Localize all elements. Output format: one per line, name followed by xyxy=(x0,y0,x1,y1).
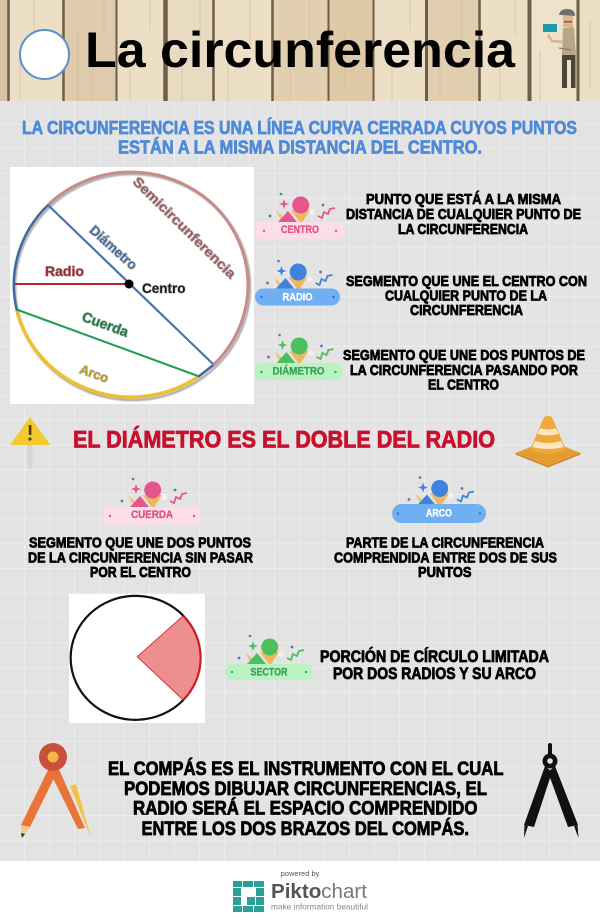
text: definition of cuerda: SEGMENTO QUE UNE DOS PUNTOS xyxy=(29,534,251,552)
text: definition of arco: PUNTOS xyxy=(418,564,472,581)
badge: radio: RADIO xyxy=(282,292,313,304)
powered by label: powered by xyxy=(281,869,320,878)
arc: blue small xyxy=(198,365,213,377)
icon: man holding a card xyxy=(543,9,576,88)
icon: black compass xyxy=(524,743,578,838)
Piktochart logo mark xyxy=(233,881,264,912)
intro text xyxy=(22,117,577,158)
heading: diameter is double the radius: EL DIÁMETRO ES EL DOBLE DEL RADIO xyxy=(73,426,495,454)
text: definition of arco: PARTE DE LA CIRCUNFERENCIA xyxy=(346,534,544,552)
arc: blue left xyxy=(14,205,48,311)
text: compass explanation: RADIO SERÁ EL ESPACIO COMPRENDIDO xyxy=(133,798,478,820)
badge: sector xyxy=(225,635,313,680)
text: definition of sector: PORCIÓN DE CÍRCULO LIMITADA xyxy=(320,647,549,666)
radius line xyxy=(15,283,129,285)
text: definition of radio xyxy=(346,273,587,319)
intro text: ESTÁN A LA MISMA DISTANCIA DEL CENTRO. xyxy=(118,136,482,158)
text: compass explanation: ENTRE LOS DOS BRAZOS DEL COMPÁS. xyxy=(142,818,469,840)
label: Cuerda: Cuerda xyxy=(80,308,131,340)
label: Semicircunferencia: Semicircunferencia xyxy=(130,174,239,282)
text: compass explanation xyxy=(108,758,504,840)
footer xyxy=(0,861,600,921)
text: definition of diámetro: EL CENTRO xyxy=(428,376,499,394)
text: definition of cuerda: POR EL CENTRO xyxy=(90,564,191,581)
label: Centro: Centro xyxy=(142,281,186,296)
text: definition of cuerda: DE LA CIRCUNFERENCIA SIN PASAR xyxy=(28,550,253,566)
arc: yellow xyxy=(17,311,198,397)
text: definition of centro: PUNTO QUE ESTÁ A LA MISMA xyxy=(366,191,561,208)
badge: diámetro: DIÁMETRO xyxy=(272,364,325,378)
chord line xyxy=(18,310,198,376)
text: definition of radio: CIRCUNFERENCIA xyxy=(410,302,523,319)
badge: centro xyxy=(255,193,345,239)
text: definition of radio: CUALQUIER PUNTO DE LA xyxy=(385,288,547,304)
badge: cuerda: CUERDA xyxy=(131,509,173,521)
icon: warning sign xyxy=(10,417,50,469)
diagram: circular sector xyxy=(69,594,205,723)
label: Radio: Radio xyxy=(45,263,84,279)
icon: header circle xyxy=(20,30,69,79)
tagline: make information beautiful xyxy=(271,902,368,912)
label: Arco: Arco xyxy=(78,361,111,386)
diagram: parts of the circumference xyxy=(10,167,254,404)
text: definition of arco: COMPRENDIDA ENTRE DOS DE SUS xyxy=(334,550,557,566)
badge: centro: CENTRO xyxy=(281,224,319,236)
centre point xyxy=(124,280,134,288)
label: Diámetro: Diámetro xyxy=(87,222,140,273)
badge: sector: SECTOR xyxy=(250,666,288,678)
badge: arco xyxy=(392,476,486,523)
icon: orange compass xyxy=(21,743,91,838)
text: compass explanation: PODEMOS DIBUJAR CIRCUNFERENCIAS, EL xyxy=(124,779,487,800)
text: definition of cuerda xyxy=(28,534,253,581)
text: definition of sector: POR DOS RADIOS Y SU ARCO xyxy=(333,665,536,683)
text: definition of arco xyxy=(334,534,557,581)
text: definition of sector xyxy=(320,647,549,683)
text: compass explanation: EL COMPÁS ES EL INSTRUMENTO CON EL CUAL xyxy=(108,758,504,780)
text: definition of centro xyxy=(346,191,581,238)
arc: semicircumference xyxy=(48,172,248,365)
badge: arco: ARCO xyxy=(426,508,452,520)
badge: diámetro xyxy=(254,334,342,380)
icon: traffic cone xyxy=(516,416,580,468)
text: definition of centro: LA CIRCUNFERENCIA xyxy=(398,221,528,238)
badge: cuerda xyxy=(104,478,200,525)
header: wood planks xyxy=(0,0,600,101)
diameter line xyxy=(48,205,213,364)
text: definition of diámetro xyxy=(343,347,585,394)
badge: radio xyxy=(255,260,340,306)
title: La circunferencia xyxy=(85,22,516,78)
Piktochart wordmark: Piktochart xyxy=(271,881,367,903)
